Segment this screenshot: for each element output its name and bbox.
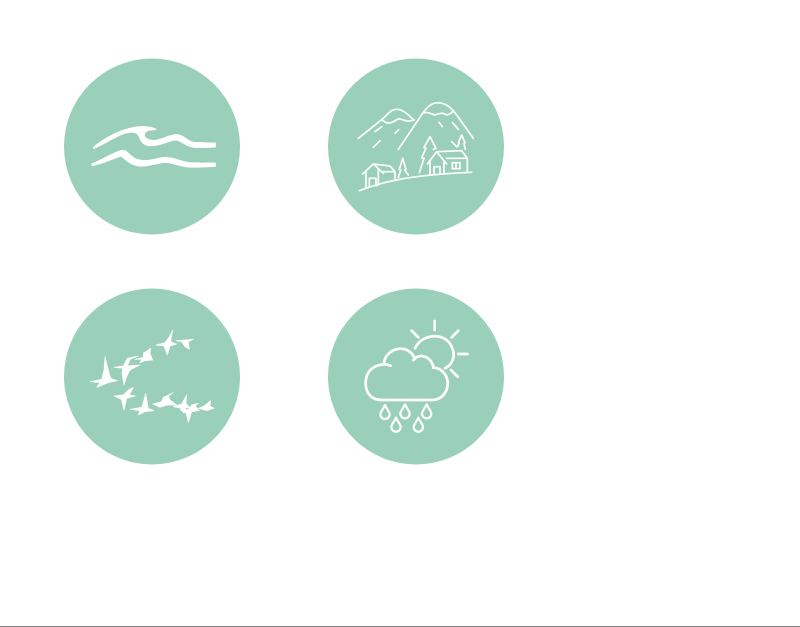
icon: waves [64, 58, 240, 234]
icon: flock of birds [64, 288, 240, 464]
bottom rule [0, 626, 800, 627]
icon: mountain village [328, 58, 504, 234]
icon: sun, cloud and rain [328, 288, 504, 464]
